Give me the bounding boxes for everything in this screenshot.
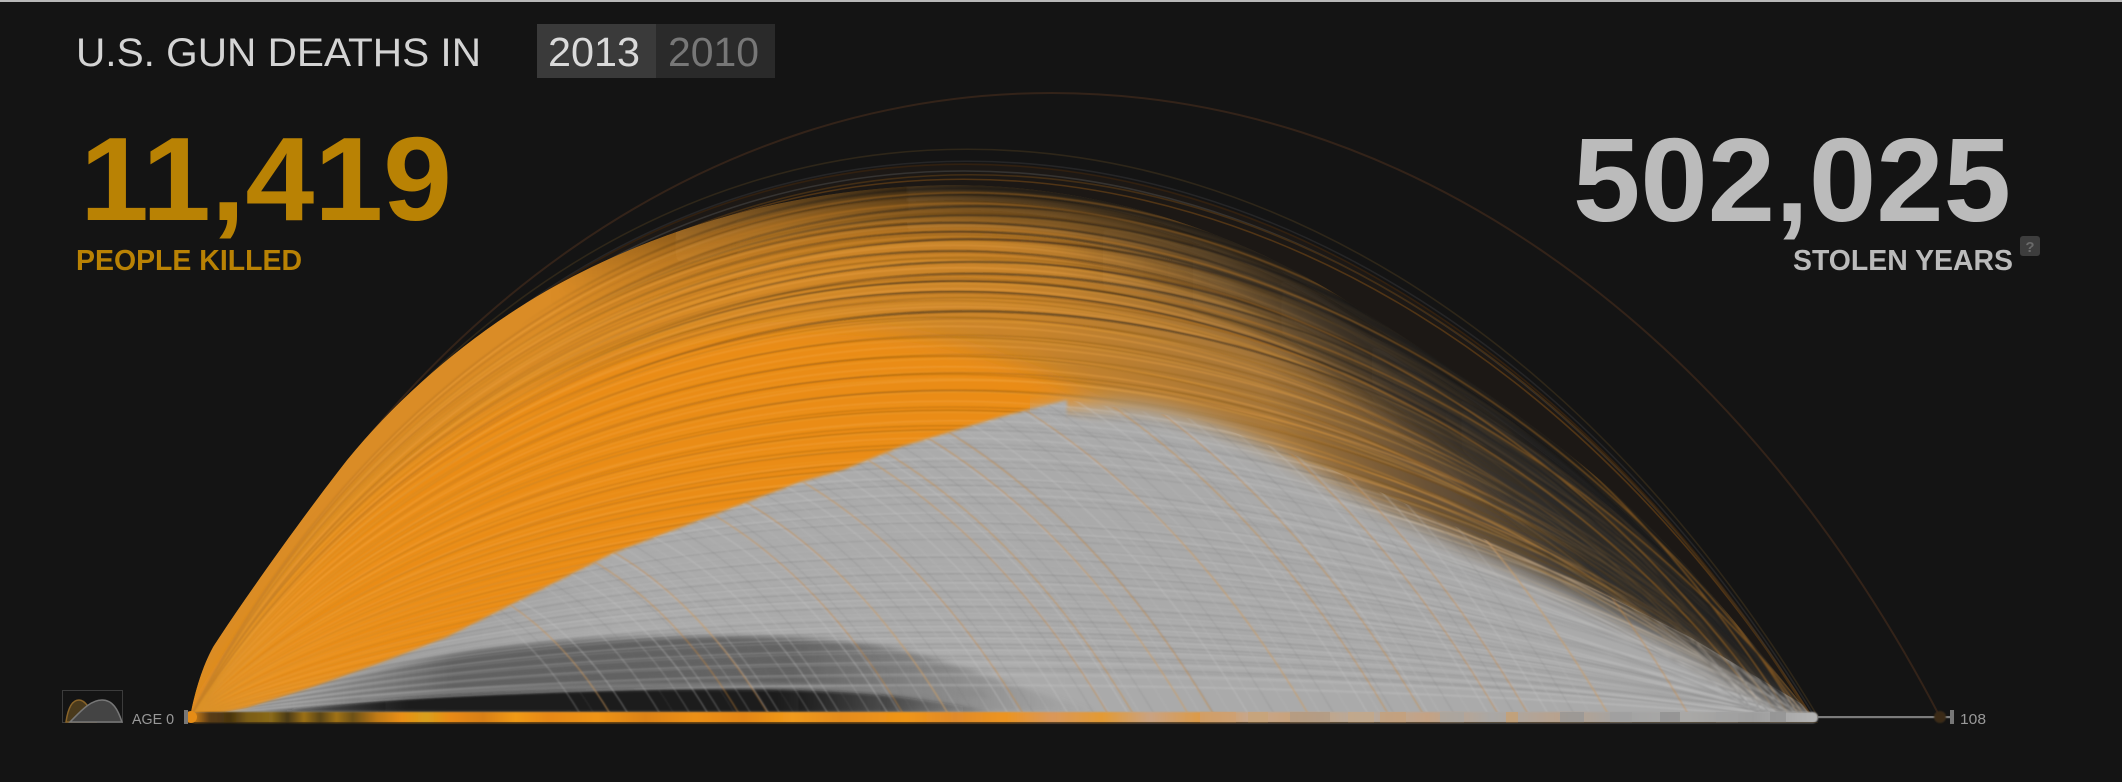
light descending arcs	[518, 401, 1534, 712]
lighter seam	[360, 683, 990, 702]
help badge: ?	[2025, 239, 2035, 256]
grey solid fill under soft edge	[1060, 415, 1790, 716]
grey streaks	[194, 401, 1809, 713]
fine streak layers	[190, 188, 1812, 717]
mid-grey band	[290, 636, 1100, 712]
outermost arc: oldest age	[190, 93, 1940, 717]
dark rim shading	[546, 185, 1812, 717]
light orange streaks	[222, 224, 1734, 708]
end dot	[1934, 711, 1946, 723]
grey soft upper right	[1000, 403, 1812, 740]
faint outer arcs	[190, 149, 1818, 717]
icon: distribution thumbnail	[62, 690, 122, 722]
title: U.S. GUN DEATHS IN	[76, 31, 481, 75]
dark descending arcs	[186, 222, 1576, 717]
grey wedge below diagonal	[190, 400, 1067, 720]
faint haze behind outer arcs	[190, 163, 1812, 717]
thin orange arcs over grey	[190, 183, 1690, 717]
stat: people killed number: 11,419	[80, 113, 452, 246]
age band along baseline	[190, 712, 1818, 723]
second dark fan arcs	[1516, 592, 1782, 712]
stat: people killed label: PEOPLE KILLED	[76, 245, 302, 277]
chart: arc diagram of lives lived and stolen years	[172, 93, 1954, 740]
button: 2010	[656, 24, 775, 78]
dark orange streaks	[206, 212, 1616, 710]
soft edge at arc top	[546, 185, 1812, 717]
dark streaked zone on right shoulder	[1060, 250, 1795, 705]
button: 2013	[537, 24, 656, 78]
dark lower bands in grey region	[263, 636, 1100, 713]
orange region: years lived	[190, 185, 1812, 730]
origin dot	[185, 711, 197, 723]
year toggle	[537, 24, 775, 78]
button: 2010: 2010	[668, 29, 759, 75]
stat: stolen years label: STOLEN YEARS	[1793, 245, 2013, 277]
light grey fan arcs	[196, 404, 1809, 712]
right tick	[1950, 710, 1954, 724]
near-black band	[263, 689, 1000, 713]
stat: stolen years number: 502,025	[1573, 114, 2011, 247]
life line to oldest age	[1818, 716, 1950, 718]
mid descending arcs	[202, 222, 1592, 717]
grey region: stolen years	[190, 400, 1812, 740]
second light streaks	[250, 216, 1721, 680]
second light fan arcs	[230, 415, 1808, 712]
second dark streaks	[231, 238, 1600, 688]
button: 2013: 2013	[548, 29, 640, 75]
left tick	[184, 710, 188, 724]
upper dark streaks	[553, 187, 1732, 659]
axis label: age 0: AGE 0	[132, 711, 174, 728]
third light streaks	[304, 232, 1724, 666]
dark grey fan arcs	[253, 412, 1786, 712]
help badge	[2020, 236, 2040, 256]
envelope fill	[190, 185, 1812, 717]
bright orange core	[190, 328, 1130, 730]
more light descending arcs	[172, 222, 1562, 717]
axis label: 108: 108	[1960, 711, 1986, 728]
orange threads on right shoulder	[190, 193, 1812, 717]
band blotches	[1200, 712, 1786, 723]
